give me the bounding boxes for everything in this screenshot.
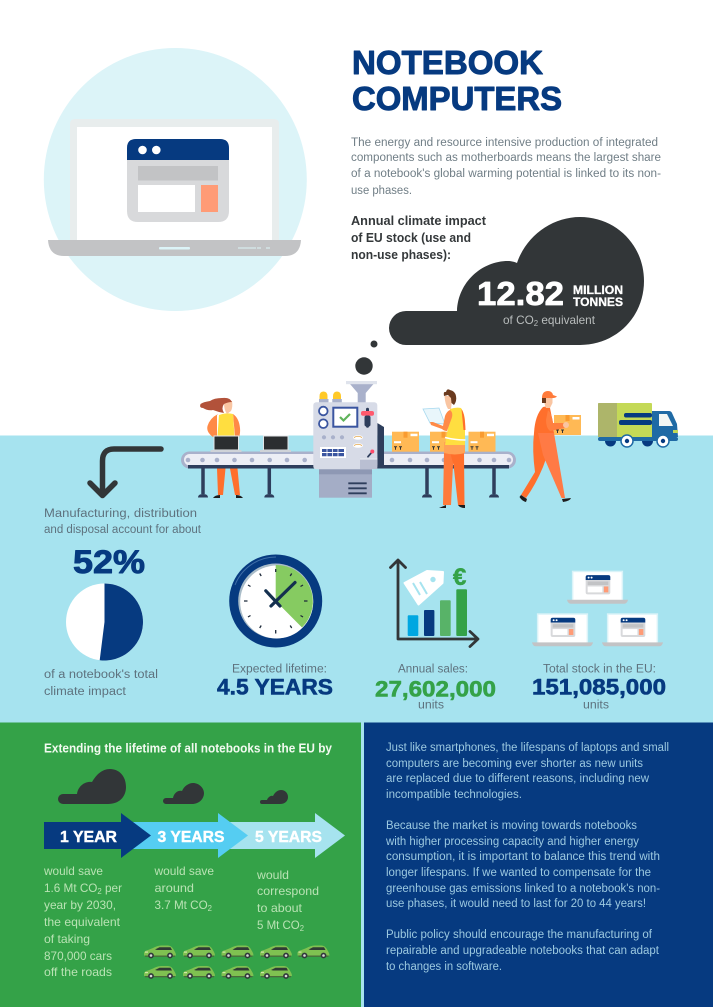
paragraph 2: with higher processing capacity and higher energy xyxy=(385,836,639,848)
paragraph 2: consumption, it is important to balance this trend with xyxy=(386,851,660,863)
annual climate impact heading: of EU stock (use and xyxy=(351,231,471,245)
boxes on belt xyxy=(392,432,496,452)
paragraph 2 xyxy=(385,820,660,910)
text: 3 years: would save xyxy=(154,864,214,878)
annual climate impact heading: Annual climate impact xyxy=(351,214,487,228)
arrows xyxy=(44,813,345,858)
paragraph 1: computers are becoming ever shorter as new units xyxy=(386,758,643,770)
conveyor belt xyxy=(181,452,516,498)
stat: expected lifetime: Expected lifetime: xyxy=(232,664,327,676)
paragraph 1 xyxy=(386,742,669,801)
paragraph 1: incompatible technologies. xyxy=(386,789,522,801)
worker: carrying box xyxy=(520,391,581,502)
text: of total climate impact: climate impact xyxy=(44,686,127,698)
pie chart: 52% xyxy=(66,584,143,660)
stat: total stock xyxy=(532,664,666,712)
intro text: components such as motherboards means the largest share xyxy=(351,152,661,164)
cloud callout: 12.82 million tonnes: MILLION xyxy=(573,283,623,297)
intro text xyxy=(351,137,661,197)
stat: expected lifetime xyxy=(217,664,333,700)
text: 3 years: around xyxy=(154,881,194,895)
intro text: The energy and resource intensive production of integrated xyxy=(351,137,658,149)
paragraph 3: Public policy should encourage the manufacturing of xyxy=(386,929,653,941)
stat: 52%: 52% xyxy=(73,544,145,580)
light blue band xyxy=(0,436,713,724)
heading: Extending the lifetime of all notebooks in the EU by xyxy=(44,742,332,756)
text: 3 years: 3.7 Mt CO xyxy=(154,898,209,912)
cloud callout: 12.82 million tonnes: 12.82 xyxy=(477,275,564,312)
machine xyxy=(313,381,384,498)
text: 3 years: 2 xyxy=(208,904,213,913)
stat: annual sales: 27,602,000 xyxy=(375,676,496,702)
paragraph 3: repairable and upgradeable notebooks that can adapt xyxy=(386,945,660,957)
text: 5 years: correspond xyxy=(257,884,319,898)
title xyxy=(352,44,562,117)
text: 1 year: of taking xyxy=(44,932,90,946)
paragraph 1: are replaced due to different reasons, including new xyxy=(386,773,650,785)
paragraph 2: longer lifespans. If we wanted to compensate for the xyxy=(386,867,651,879)
cloud callout: 12.82 million tonnes: of CO xyxy=(503,313,534,327)
stat: annual sales: units xyxy=(418,700,444,712)
arrow: down to manufacturing xyxy=(90,449,161,496)
worker: woman at laptop xyxy=(200,398,243,498)
paragraph 2: Because the market is moving towards notebooks xyxy=(386,820,637,832)
icon: sales bar chart xyxy=(390,560,478,646)
paragraph 1: Just like smartphones, the lifespans of laptops and small xyxy=(386,742,669,754)
stat: annual sales xyxy=(375,664,496,712)
text: of total climate impact xyxy=(44,669,158,698)
panel: green lifetime extension xyxy=(0,722,361,1007)
cloud callout: 12.82 million tonnes xyxy=(355,217,644,375)
arrows: 1 YEAR xyxy=(60,829,117,846)
text: manufacturing share intro xyxy=(44,508,202,536)
laptops on belt xyxy=(210,436,291,452)
clouds xyxy=(58,769,288,804)
title: NOTEBOOK xyxy=(352,44,543,81)
cloud callout: 12.82 million tonnes: 2 xyxy=(534,319,539,328)
intro text: use phases. xyxy=(351,185,412,197)
icon: sales bar chart: € xyxy=(453,564,466,591)
arrows: 5 YEARS xyxy=(255,829,322,846)
arrows: 3 YEARS xyxy=(158,829,225,846)
paragraph 2: greenhouse gas emissions linked to a notebook's non- xyxy=(386,883,660,895)
text: manufacturing share intro: Manufacturing, distribution xyxy=(44,508,197,520)
text: 5 years xyxy=(256,868,319,933)
title: COMPUTERS xyxy=(352,80,562,117)
paragraph 2: use phases, it would need to last for 20 to 44 years! xyxy=(386,898,646,910)
text: of total climate impact: of a notebook's total xyxy=(44,669,158,681)
text: 1 year: the equivalent xyxy=(44,915,121,929)
text: 5 years: to about xyxy=(257,901,303,915)
stat: total stock: units xyxy=(583,700,609,712)
icon: large laptop xyxy=(48,119,301,256)
stat: expected lifetime: 4.5 YEARS xyxy=(217,674,333,700)
text: 1 year: 1.6 Mt CO xyxy=(44,881,99,895)
worker: inspector with clipboard xyxy=(423,389,466,508)
stat: total stock: Total stock in the EU: xyxy=(543,664,656,676)
stat: total stock: 151,085,000 xyxy=(532,674,666,700)
text: manufacturing share intro: and disposal account for about xyxy=(44,524,202,536)
icon: three laptops xyxy=(532,571,663,646)
intro text: of a notebook's global warming potential is linked to its non- xyxy=(351,168,661,180)
text: 1 year: per xyxy=(102,881,122,895)
stat: annual sales: Annual sales: xyxy=(398,664,468,676)
text: 1 year: year by 2030, xyxy=(44,898,116,912)
icon: clock xyxy=(229,554,322,648)
hero circle with laptop xyxy=(44,48,307,311)
text: 5 years: would xyxy=(256,868,289,882)
annual climate impact heading: non-use phases): xyxy=(351,248,451,262)
text: 3 years xyxy=(154,864,214,913)
text: 5 years: 2 xyxy=(300,924,305,933)
paragraph 3: to changes in software. xyxy=(386,961,502,973)
delivery truck xyxy=(598,403,678,447)
text: 1 year xyxy=(43,864,122,979)
divider xyxy=(361,722,364,1007)
text: 1 year: would save xyxy=(43,864,103,878)
text: 1 year: 870,000 cars xyxy=(44,949,112,963)
cloud callout: 12.82 million tonnes: TONNES xyxy=(573,295,623,309)
annual climate impact heading xyxy=(351,214,487,262)
cloud callout: 12.82 million tonnes: equivalent xyxy=(538,313,596,327)
text: 1 year: off the roads xyxy=(44,965,112,979)
text: 1 year: 2 xyxy=(97,887,102,896)
icon: cars xyxy=(144,946,330,979)
paragraph 3 xyxy=(386,929,660,973)
text: 5 years: 5 Mt CO xyxy=(257,918,302,932)
panel: blue explanation xyxy=(364,722,713,1007)
production line illustration xyxy=(181,381,678,508)
